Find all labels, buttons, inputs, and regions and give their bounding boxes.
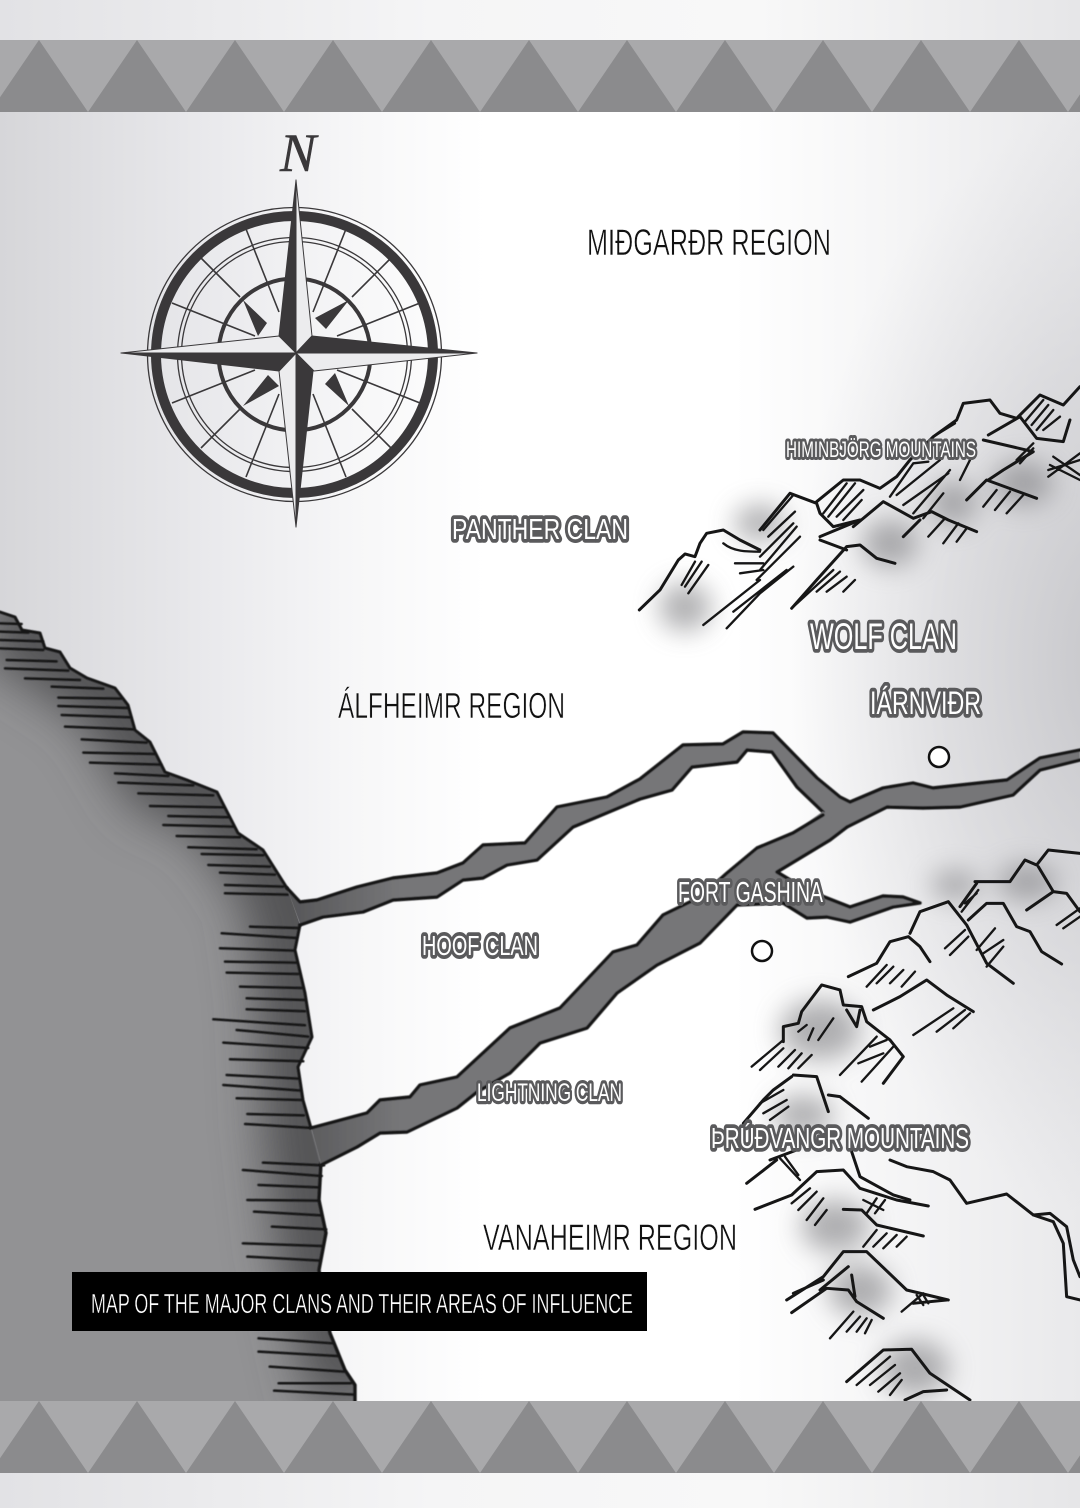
southern mountains: upper range [743,850,1080,1123]
southern mountains: lower range [747,1147,1080,1400]
river: southern branch [311,812,920,1165]
clan label: Panther: PANTHER CLAN [452,514,628,546]
clan label: Hoof: HOOF CLAN [422,930,538,961]
bottom triangle border [0,1401,1080,1473]
compass star points [121,180,477,527]
bottom decorative strip [0,1473,1080,1508]
marker: Iárnviðr [929,747,949,767]
region label: Vanaheimr: VANAHEIMR REGION [483,1217,737,1258]
clan label: Wolf: WOLF CLAN [810,616,957,657]
compass rings [148,208,442,502]
compass north letter: N [279,123,319,183]
label: Þrúðvangr Mountains: ÞRÚÐVANGR MOUNTAINS [711,1122,969,1155]
place label: Iárnviðr: IÁRNVIÐR [870,685,981,721]
mountain shading [659,461,1057,1396]
rivers [287,732,1080,1165]
label: Himinbjörg Mountains: HIMINBJÖRG MOUNTAINS [786,437,976,462]
region label: Álfheimr: ÁLFHEIMR REGION [338,685,565,726]
compass rose [121,180,477,527]
clan label: Lightning: LIGHTNING CLAN [477,1079,622,1107]
river: northern branch [287,732,1080,925]
top decorative strip [0,0,1080,40]
lower coast hatching [243,1114,355,1395]
place label: Fort Gashina: FORT GASHINA [678,877,823,909]
top triangle border [0,40,1080,112]
compass diagonal darts [243,300,349,406]
compass spokes [172,229,420,477]
sea and coastline [0,610,358,1401]
northern mountains: Himinbjörg range [639,387,1080,628]
upper coast hatching [0,623,308,1100]
marker: Fort Gashina [752,941,772,961]
caption text: MAP OF THE MAJOR CLANS AND THEIR AREAS OF INFLUENCE [91,1288,633,1319]
caption box [72,1272,647,1331]
region label: Miðgarðr: MIÐGARÐR REGION [587,222,831,263]
